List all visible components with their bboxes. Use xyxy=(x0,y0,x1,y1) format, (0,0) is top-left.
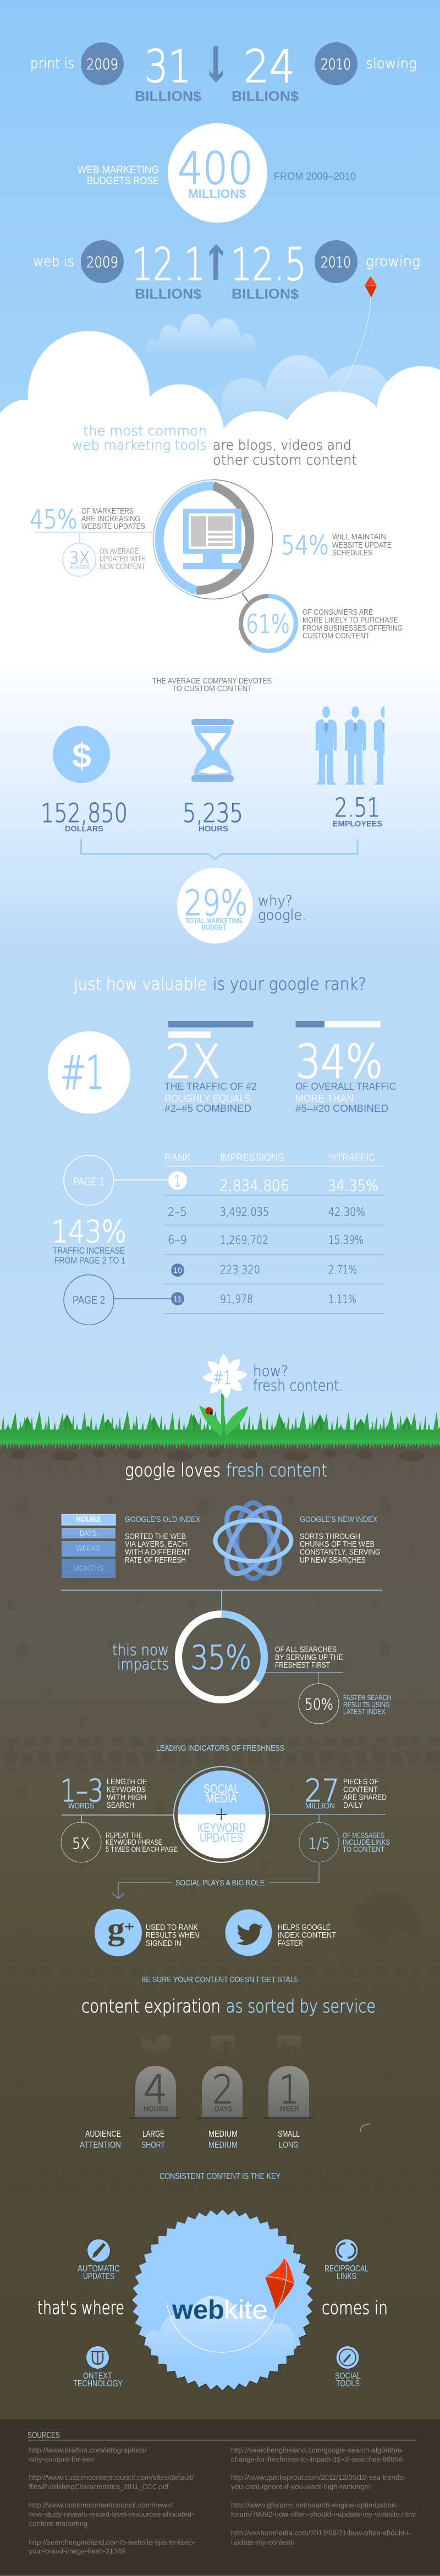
arrow: down xyxy=(210,46,223,82)
circle with 400 millions xyxy=(168,123,267,223)
sources left column: new-study-reveals-record-level-resources-allocated- xyxy=(29,2510,194,2518)
badge: 2010: 2010 xyxy=(321,254,351,271)
heading: google loves fresh content: fresh content xyxy=(226,1460,327,1481)
table header: %TRAFFIC xyxy=(328,1152,375,1163)
stat: 50% faster: RESULTS USING xyxy=(343,1700,390,1709)
chart: old index layers: WEEKS xyxy=(76,1544,100,1553)
row rank 1: 1 xyxy=(174,1172,182,1190)
panel: sources footer xyxy=(0,2419,440,2576)
tombstone: 1 week: 1 xyxy=(279,2067,300,2112)
stat: 50% faster: 50% xyxy=(305,1695,333,1713)
stat: 54% maintain: 54% xyxy=(281,531,329,561)
sky background xyxy=(0,0,440,440)
stat: 3x a week: NEW CONTENT xyxy=(100,562,145,571)
social: google plus: SIGNED IN xyxy=(146,1939,182,1948)
arrow: up xyxy=(210,244,223,280)
sources left column: content-marketing xyxy=(29,2519,88,2528)
table: audience and attention: ATTENTION xyxy=(80,2141,121,2150)
row rank 6-9: 6–9 xyxy=(168,1233,187,1246)
sources left column xyxy=(28,2446,196,2555)
icon: dollar coin xyxy=(53,726,110,783)
callout: page 1: PAGE 1 xyxy=(73,1176,105,1188)
social: google plus: g xyxy=(107,1911,125,1946)
stat: 61% of consumers xyxy=(241,593,403,651)
badge: 2010 xyxy=(315,42,358,85)
stat: 1-3 words: SEARCH xyxy=(107,1801,134,1810)
heading: most common web marketing tools: other custom content xyxy=(213,452,357,468)
feature: reciprocal links xyxy=(324,2239,369,2281)
text: why google: google. xyxy=(258,907,306,924)
callout: 29% total marketing budget xyxy=(177,868,253,944)
row rank 10 xyxy=(171,1263,357,1277)
social: twitter: INDEX CONTENT xyxy=(278,1930,336,1940)
stat: 1/5 messages xyxy=(299,1822,390,1862)
stat: 45% of marketers: ARE INCREASING xyxy=(81,514,140,523)
badge: number 1 xyxy=(48,1031,130,1114)
heading: google loves fresh content: google loves xyxy=(125,1460,221,1481)
row rank 6-9: 15.39% xyxy=(328,1233,364,1246)
label: web is: web is xyxy=(33,253,74,270)
label: slowing: slowing xyxy=(366,56,417,72)
badge: social media plus keyword updates: SOCIAL xyxy=(204,1781,239,1796)
tombstone: 4 hours xyxy=(130,2066,180,2119)
stat: 45% of marketers: 45% xyxy=(30,505,78,535)
feature: ontext technology: ONTEXT xyxy=(83,2371,112,2381)
sources right column: you-cant-ignore-if-you-want-high-rankings/ xyxy=(231,2483,370,2491)
stat: 143% traffic increase xyxy=(52,1214,127,1266)
number: 24 billion xyxy=(232,41,299,104)
text: how fresh content xyxy=(253,1363,343,1394)
number: 12.5 billion: BILLION$ xyxy=(232,286,299,302)
social: google plus xyxy=(95,1909,199,1956)
badge: 2010: 2010 xyxy=(321,56,351,73)
ghost social icons: f xyxy=(221,2039,231,2062)
stat: 34% of traffic: MORE THAN xyxy=(295,1093,354,1104)
number: 31 billion: BILLION$ xyxy=(135,89,201,104)
chart: old index layers xyxy=(62,1514,116,1578)
heading: most common web marketing tools xyxy=(72,423,357,468)
stat: 34% of traffic: #5–#20 COMBINED xyxy=(295,1103,388,1114)
stat: 1/5 messages: INCLUDE LINKS xyxy=(343,1838,390,1846)
social: google plus: USED TO RANK xyxy=(146,1923,198,1932)
row rank 10: 10 xyxy=(173,1266,182,1275)
sources left column: your-brand-image-fresh-31349 xyxy=(29,2547,125,2555)
icon: dollar coin: $ xyxy=(72,737,91,775)
arrow: social plays a big role xyxy=(112,1862,319,1899)
stat: 61% of consumers: OF CONSUMERS ARE xyxy=(302,608,373,617)
number: 12.1 billion: 12.1 xyxy=(132,239,205,291)
text: google's old index: WITH A DIFFERENT xyxy=(125,1547,191,1557)
text: from 2009-2010: FROM 2009–2010 xyxy=(274,171,356,183)
row rank 6-9: 1,269,702 xyxy=(220,1233,268,1246)
number: 31 billion xyxy=(135,41,201,104)
stat: 61% of consumers: FROM BUSINESSES OFFERING xyxy=(302,624,403,633)
tombstone: 1 week xyxy=(263,2066,314,2119)
text: comes in: comes in xyxy=(322,2297,388,2318)
text: web marketing budgets rose xyxy=(78,164,159,187)
callout: page 1 xyxy=(64,1155,168,1205)
chart: 35% ring xyxy=(178,1614,265,1700)
tombstone: 1 week: WEEK xyxy=(279,2104,299,2114)
sources right column: update-my-content/ xyxy=(231,2538,295,2546)
feature: automatic updates: UPDATES xyxy=(83,2272,114,2281)
stat: 54% maintain: WILL MAINTAIN xyxy=(332,532,386,542)
text: of all searches: FRESHEST FIRST xyxy=(275,1661,330,1670)
row rank 1: 2,834,806 xyxy=(219,1177,289,1194)
table: audience and attention: AUDIENCE xyxy=(85,2130,121,2139)
stat: 2x traffic: #2–#5 COMBINED xyxy=(164,1103,251,1114)
badge: social media plus keyword updates: UPDATES xyxy=(200,1830,243,1845)
feature: reciprocal links: RECIPROCAL xyxy=(324,2264,369,2274)
badge: 2010 xyxy=(315,240,358,283)
icon: hourglass xyxy=(191,719,234,782)
stat row: web is growing xyxy=(33,239,420,302)
social: twitter: HELPS GOOGLE xyxy=(278,1923,331,1932)
stat: 1-3 words: WITH HIGH xyxy=(107,1793,146,1802)
heading: consistent content: CONSISTENT CONTENT IS THE KEY xyxy=(160,2172,280,2181)
row rank 2-5: 3,492,035 xyxy=(220,1205,269,1218)
logo xyxy=(172,2296,268,2325)
stat: 27 million: PIECES OF xyxy=(343,1777,378,1786)
number: 12.5 billion: 12.5 xyxy=(230,239,306,291)
sources right column: http://www.gforums.net/search-engine-optimization- xyxy=(231,2501,398,2509)
burst cloud xyxy=(145,2296,296,2364)
tombstone: 2 days xyxy=(197,2066,247,2119)
badge: webkite starburst xyxy=(132,2210,314,2391)
chart: old index layers: MONTHS xyxy=(73,1564,104,1573)
row rank 10: 223,320 xyxy=(220,1263,260,1276)
row rank 11: 91,978 xyxy=(220,1292,253,1305)
stat: 1/5 messages: TO CONTENT xyxy=(343,1845,384,1854)
stat: 27 million: ARE SHARED xyxy=(343,1793,387,1802)
table: audience and attention: SMALL xyxy=(278,2130,300,2139)
stat: 143% traffic increase: FROM PAGE 2 TO 1 xyxy=(54,1255,125,1266)
icon: new index orbits xyxy=(216,1499,292,1582)
table header: IMPRESSIONS xyxy=(220,1152,284,1163)
row rank 2-5: 2–5 xyxy=(168,1205,187,1218)
stat: 2x traffic xyxy=(164,1021,257,1114)
text: this now impacts xyxy=(112,1641,169,1673)
row rank 1 xyxy=(168,1171,378,1194)
table: audience and attention xyxy=(80,2130,300,2150)
icon: worm xyxy=(360,2124,370,2132)
kite xyxy=(265,2257,294,2310)
badge: social media plus keyword updates: MEDIA xyxy=(206,1791,238,1805)
stat: 3x a week xyxy=(63,543,146,576)
row rank 10: 2.71% xyxy=(328,1263,357,1276)
heading: content expiration xyxy=(81,1995,376,2017)
text: google's new index: CONSTANTLY, SERVING xyxy=(300,1547,381,1557)
label: print is: print is xyxy=(30,56,74,72)
text: google's new index: CHUNKS OF THE WEB xyxy=(300,1540,375,1549)
stat: 34% of traffic xyxy=(295,1021,396,1114)
feature: automatic updates xyxy=(78,2239,120,2281)
ghost social icons: in xyxy=(280,2039,298,2059)
text: google's old index: SORTED THE WEB xyxy=(125,1532,186,1541)
heading: content expiration: content expiration xyxy=(81,1995,221,2017)
stat: 5x repeat keyword: REPEAT THE xyxy=(106,1831,142,1840)
kite string xyxy=(167,2302,276,2352)
stat: 3x a week: ON AVERAGE xyxy=(100,547,139,556)
bracket arrow xyxy=(81,839,358,859)
soil background xyxy=(0,1443,440,2420)
badge: 2009 xyxy=(81,240,124,283)
chart: ring around monitor xyxy=(153,479,273,599)
number: 24 billion: BILLION$ xyxy=(232,89,299,104)
logo: kite xyxy=(224,2296,268,2325)
stat: 27 million xyxy=(270,1773,387,1823)
table: audience and attention: MEDIUM xyxy=(208,2130,238,2139)
stat: 2x traffic: 2X xyxy=(166,1035,221,1089)
row rank 11: 11 xyxy=(173,1294,182,1303)
badge: social media plus keyword updates: KEYWORD xyxy=(197,1821,246,1835)
tombstone: 4 hours: HOURS xyxy=(144,2104,168,2114)
stat: 61% of consumers: MORE LIKELY TO PURCHASE xyxy=(302,616,398,625)
badge: social media plus keyword updates xyxy=(174,1767,270,1862)
sources left column: why-content-for-seo xyxy=(28,2455,95,2463)
stat: 61% of consumers: 61% xyxy=(246,609,290,639)
arrow: social plays a big role: SOCIAL PLAYS A BIG ROLE xyxy=(175,1878,265,1888)
chart: old index layers: HOURS xyxy=(76,1515,101,1524)
stat: employees: 2.51 xyxy=(334,793,380,823)
row rank 11 xyxy=(114,1292,356,1305)
text: google's old index: VIA LAYERS, EACH xyxy=(125,1540,187,1549)
stat: dollars: 152,850 xyxy=(41,798,128,829)
row rank 2-5: 42.30% xyxy=(328,1205,365,1218)
sources right column: change-for-freshness-to-impact-35-of-searches-99856 xyxy=(231,2455,403,2463)
heading: most common web marketing tools: are blogs, videos and xyxy=(213,437,351,453)
text: that's where: that's where xyxy=(37,2297,124,2318)
text: google's new index: SORTS THROUGH xyxy=(300,1532,360,1541)
stat: hours: HOURS xyxy=(199,824,228,834)
stat: 1-3 words xyxy=(61,1773,174,1823)
tombstone: 2 days: DAYS xyxy=(215,2104,232,2114)
sources left column: http://searchengineland.com/5-website-tips-to-keep- xyxy=(29,2538,196,2546)
stat: 2x traffic: ROUGHLY EQUALS xyxy=(164,1093,251,1104)
heading: leading indicators: LEADING INDICATORS OF FRESHNESS xyxy=(156,1744,284,1753)
sources left column: http://www.customcontentcouncil.com/news/ xyxy=(29,2501,173,2509)
feature: ontext technology: TECHNOLOGY xyxy=(73,2379,123,2389)
sources right column: forum/78992-how-often-should-i-update-my-website.html xyxy=(231,2510,416,2518)
grass xyxy=(0,1409,440,1452)
text: of all searches: OF ALL SEARCHES xyxy=(275,1645,337,1654)
logo: web xyxy=(172,2296,224,2325)
stat row: print is slowing xyxy=(30,41,417,104)
badge: number 1: #1 xyxy=(61,1046,105,1100)
callout: page 2: PAGE 2 xyxy=(73,1294,105,1306)
callout: page 2 xyxy=(64,1275,114,1325)
stat: 27 million: DAILY xyxy=(343,1801,363,1810)
sources heading: SOURCES xyxy=(28,2431,60,2440)
leaves xyxy=(199,1405,249,1436)
stat: 50% faster xyxy=(265,1673,391,1724)
social: twitter: FASTER xyxy=(278,1939,303,1948)
callout: budgets rose 400 million xyxy=(78,123,356,223)
sources left column: http://www.customcontentcouncil.com/sites/default/ xyxy=(29,2473,194,2481)
row rank 11: 1.11% xyxy=(328,1292,356,1305)
stat: 50% faster: FASTER SEARCH xyxy=(343,1693,391,1702)
badge: 2009 xyxy=(81,42,124,85)
text: google's old index xyxy=(125,1515,200,1565)
connector line xyxy=(61,1590,382,1610)
number: 12.1 billion: BILLION$ xyxy=(135,286,201,302)
stat: 34% of traffic: 34% xyxy=(296,1035,383,1089)
stat: 1/5 messages: OF MESSAGES xyxy=(343,1831,384,1840)
stat: employees: EMPLOYEES xyxy=(333,819,382,829)
text: this now impacts: impacts xyxy=(117,1655,169,1673)
heading: most common web marketing tools: web marketing tools xyxy=(72,437,207,453)
feature: social tools xyxy=(335,2346,361,2389)
text: google's old index: GOOGLE'S OLD INDEX xyxy=(125,1515,200,1524)
feature: social tools: SOCIAL xyxy=(335,2371,361,2381)
stat: 61% of consumers: CUSTOM CONTENT xyxy=(302,631,370,641)
number: 31 billion: 31 xyxy=(145,41,191,93)
background: white to light blue xyxy=(0,660,440,1452)
stat: 54% maintain xyxy=(281,531,392,561)
table header: RANK xyxy=(164,1152,191,1163)
icon: red kite xyxy=(365,276,377,297)
text: google's new index: GOOGLE'S NEW INDEX xyxy=(300,1515,377,1524)
sources right column: http://vashonmedia.com/2012/06/21/how-often-should-i- xyxy=(231,2529,411,2537)
heading: google loves fresh content xyxy=(125,1460,327,1481)
chart: old index layers: DAYS xyxy=(80,1529,97,1538)
circle with 400 millions: MILLION$ xyxy=(188,187,246,201)
text: how fresh content: how? xyxy=(253,1363,288,1380)
stat: 45% of marketers xyxy=(30,505,153,543)
sources left column: http://www.brafton.com/infographics/ xyxy=(29,2446,147,2454)
stat: 45% of marketers: WEBSITE UPDATES xyxy=(81,522,145,531)
stat: hours: 5,235 xyxy=(183,798,243,829)
stem xyxy=(221,1394,224,1428)
text: of all searches xyxy=(275,1645,343,1670)
text: this now impacts: this now xyxy=(112,1641,169,1659)
callout: 29% total marketing budget: TOTAL MARKETING xyxy=(185,916,243,925)
badge: 2009: 2009 xyxy=(86,56,118,73)
text: why google xyxy=(258,893,306,924)
stat: 1-3 words: WORDS xyxy=(68,1801,94,1811)
text: of all searches: BY SERVING UP THE xyxy=(275,1653,343,1662)
heading: be sure your content: BE SURE YOUR CONTENT DOESN'T GET STALE xyxy=(141,1975,299,1984)
feature: ontext technology xyxy=(73,2346,123,2389)
table header xyxy=(164,1152,375,1163)
chart: 35% ring: 35% xyxy=(191,1639,251,1677)
tombstone: 2 days: 2 xyxy=(212,2067,234,2112)
text: google's new index xyxy=(300,1515,381,1565)
stat: 45% of marketers: OF MARKETERS xyxy=(81,506,134,516)
stat: 54% maintain: SCHEDULES xyxy=(332,548,372,558)
ghost social icons xyxy=(140,2035,301,2062)
badge: 2009: 2009 xyxy=(86,254,118,271)
text: web marketing budgets rose: BUDGETS ROSE xyxy=(87,175,159,187)
stat: 27 million: CONTENT xyxy=(343,1785,378,1795)
text: google's new index: UP NEW SEARCHES xyxy=(300,1555,366,1565)
stat: 143% traffic increase: TRAFFIC INCREASE xyxy=(53,1245,125,1256)
row rank 2-5 xyxy=(168,1205,365,1218)
table: audience and attention: LONG xyxy=(279,2141,299,2150)
feature: reciprocal links: LINKS xyxy=(337,2272,356,2281)
stat: 5x repeat keyword xyxy=(61,1822,178,1862)
heading: content expiration: as sorted by service xyxy=(226,1995,376,2017)
stat: 27 million: MILLION xyxy=(305,1801,335,1811)
label: growing: growing xyxy=(366,253,420,270)
text: how fresh content: fresh content. xyxy=(253,1377,343,1394)
heading: how valuable is your google rank: just how valuable xyxy=(73,975,207,994)
heading: average company devotes xyxy=(152,676,272,693)
flower xyxy=(199,1354,249,1436)
number: 12.1 billion xyxy=(132,239,205,302)
sources right column xyxy=(231,2446,416,2546)
stat: 5x repeat keyword: 5X xyxy=(72,1834,90,1852)
stat: 27 million: 27 xyxy=(305,1773,339,1809)
icon: dinosaur fossil xyxy=(352,1893,420,1955)
stat: 1-3 words: LENGTH OF xyxy=(107,1777,147,1786)
stat: 1-3 words: 1–3 xyxy=(61,1773,103,1809)
pale clouds xyxy=(147,314,387,429)
stat: 1-3 words: KEYWORDS xyxy=(107,1785,146,1795)
heading: how valuable is your google rank xyxy=(73,975,366,994)
table: audience and attention: LARGE xyxy=(142,2130,164,2139)
heading: most common web marketing tools: the most common xyxy=(83,423,207,439)
flower number: #1 xyxy=(213,1367,232,1389)
text: why google: why? xyxy=(258,893,293,909)
feature: automatic updates: AUTOMATIC xyxy=(78,2264,120,2274)
icon: monitor xyxy=(183,509,241,569)
callout: 29% total marketing budget: 29% xyxy=(184,883,248,923)
table: rank impressions traffic xyxy=(114,1152,385,1314)
social: google plus: RESULTS WHEN xyxy=(146,1930,199,1940)
number: 24 billion: 24 xyxy=(244,41,295,93)
text: google's old index: RATE OF REFRESH xyxy=(125,1555,186,1565)
stat: 3x a week: UPDATED WITH xyxy=(100,554,146,564)
text: web marketing budgets rose: WEB MARKETING xyxy=(78,164,159,176)
icon: employees xyxy=(316,706,384,785)
stat: 5x repeat keyword: KEYWORD PHRASE xyxy=(106,1838,162,1846)
petals xyxy=(202,1354,248,1399)
feature: social tools: TOOLS xyxy=(336,2379,360,2389)
stat: 3x a week: 3X xyxy=(69,549,90,568)
white cloud bank xyxy=(0,331,440,665)
stat: dollars: DOLLARS xyxy=(65,824,103,834)
circle with 400 millions: 400 xyxy=(178,143,253,194)
stat: 50% faster: LATEST INDEX xyxy=(343,1707,386,1716)
stat: 143% traffic increase: 143% xyxy=(52,1214,127,1249)
heading: average company devotes: TO CUSTOM CONTENT xyxy=(172,684,252,693)
sources right column: http://searchengineland.com/google-search-algorithm- xyxy=(231,2446,404,2454)
table: audience and attention: MEDIUM xyxy=(208,2141,238,2150)
ladybug xyxy=(205,1407,213,1415)
row rank 1: 34.35% xyxy=(328,1177,378,1194)
row rank 6-9 xyxy=(168,1233,364,1246)
stat: 1/5 messages: 1/5 xyxy=(308,1834,330,1852)
number: 12.5 billion xyxy=(230,239,306,302)
kite string xyxy=(339,297,371,391)
stat: 54% maintain: WEBSITE UPDATE xyxy=(332,540,392,550)
sources left column: files/PublishingCharacteristics_2011_CCC.pdf xyxy=(29,2483,169,2491)
table: audience and attention: SHORT xyxy=(141,2141,165,2150)
tombstone: 4 hours: 4 xyxy=(144,2067,167,2112)
stat: 2x traffic: THE TRAFFIC OF #2 xyxy=(164,1081,257,1092)
stat: 5x repeat keyword: 5 TIMES ON EACH PAGE xyxy=(106,1845,178,1854)
heading: average company devotes: THE AVERAGE COMPANY DEVOTES xyxy=(152,676,272,686)
social: twitter xyxy=(226,1909,336,1956)
stat: 3x a week: A WEEK xyxy=(70,565,90,571)
stat: 34% of traffic: OF OVERALL TRAFFIC xyxy=(295,1081,396,1092)
sources right column: http://www.quicksprout.com/2011/12/05/10-seo-trends- xyxy=(231,2473,405,2481)
callout: 29% total marketing budget: BUDGET xyxy=(201,923,227,931)
heading: how valuable is your google rank: is your google rank? xyxy=(213,975,366,994)
